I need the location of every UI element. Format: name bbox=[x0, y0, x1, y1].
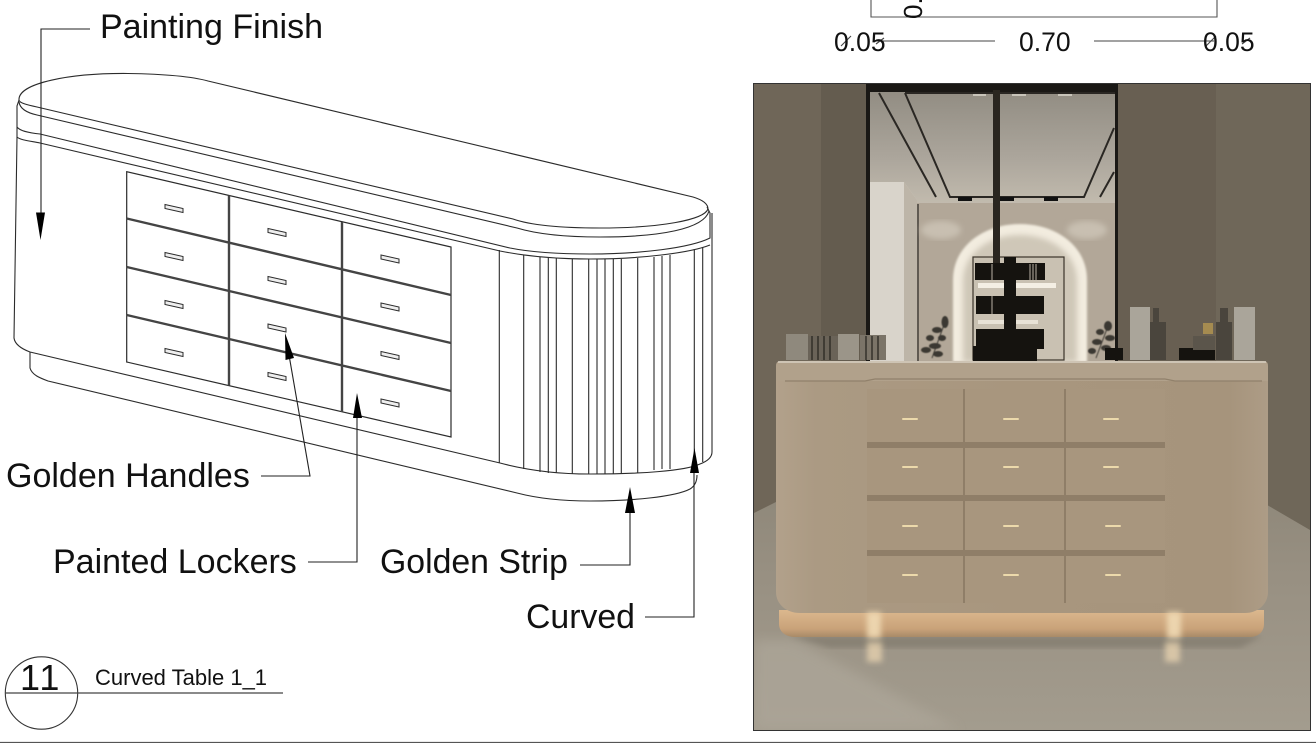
ceiling spot fittings bbox=[973, 94, 1072, 96]
right plant bbox=[1088, 321, 1115, 358]
mirror black frame bbox=[866, 84, 1118, 362]
table top surface bbox=[19, 73, 708, 228]
label: painted lockers: Painted Lockers bbox=[53, 543, 297, 581]
drawer handles bbox=[165, 204, 399, 407]
light reflections bbox=[867, 612, 1181, 662]
dimension: right 0.05: 0.05 bbox=[1203, 27, 1255, 57]
arrow: painted lockers leader bbox=[308, 393, 362, 562]
counter top band bbox=[776, 361, 1268, 381]
display stand highlights bbox=[992, 264, 1036, 314]
counter golden handles bbox=[903, 419, 1120, 575]
room walls bbox=[754, 84, 1310, 564]
table top edge bands bbox=[17, 100, 710, 259]
counter gold base strip bbox=[779, 610, 1264, 637]
label: golden strip: Golden Strip bbox=[380, 543, 568, 581]
right cosmetics group bbox=[1105, 307, 1255, 360]
dimension: centre 0.70: 0.70 bbox=[1019, 27, 1071, 57]
mirror with reflected room bbox=[869, 92, 1116, 363]
arrow: golden strip leader bbox=[580, 487, 635, 565]
mirror centre bar bbox=[993, 90, 1000, 265]
arch shelf frame bbox=[973, 257, 1064, 360]
label: painting finish: Painting Finish bbox=[100, 8, 323, 46]
fluted curved end panel bbox=[499, 247, 703, 474]
left plant bbox=[921, 316, 948, 358]
ceiling track lights bbox=[879, 93, 1116, 197]
drawing title: curved table 1_1 bbox=[5, 657, 283, 729]
line drawing: curved table bbox=[14, 73, 712, 501]
drawer dividers bbox=[127, 196, 451, 412]
floor bbox=[754, 495, 1310, 730]
counter shadow on floor bbox=[790, 636, 1262, 648]
arrow: golden handles leader bbox=[261, 333, 310, 476]
bottom page rule bbox=[0, 742, 1316, 743]
black display stand bbox=[973, 257, 1045, 361]
drawing number: 11 bbox=[20, 657, 61, 698]
drawer recess bbox=[867, 389, 1165, 603]
counter body bbox=[776, 375, 1268, 613]
top band shadow bbox=[785, 379, 1262, 381]
counter highlight bbox=[778, 361, 1266, 363]
left cosmetics group bbox=[786, 334, 886, 360]
plinth golden strip bbox=[30, 352, 697, 501]
photo border bbox=[754, 84, 1310, 730]
dimensions block bbox=[834, 0, 1255, 57]
table body outline bbox=[14, 137, 712, 474]
photo: rendered curved counter bbox=[754, 84, 1310, 730]
label: golden handles: Golden Handles bbox=[6, 457, 250, 495]
drawer panel bbox=[127, 172, 451, 437]
glowing arch bbox=[953, 224, 1087, 362]
label: curved: Curved bbox=[526, 598, 635, 636]
drawing name: Curved Table 1_1 bbox=[95, 665, 267, 690]
arrow: curved leader bbox=[645, 448, 699, 617]
dimension: left 0.05: 0.05 bbox=[834, 27, 886, 57]
counter drawers bbox=[867, 389, 1165, 603]
floor lighter lower-left area bbox=[756, 642, 918, 722]
arrow: painting finish leader bbox=[36, 29, 90, 240]
